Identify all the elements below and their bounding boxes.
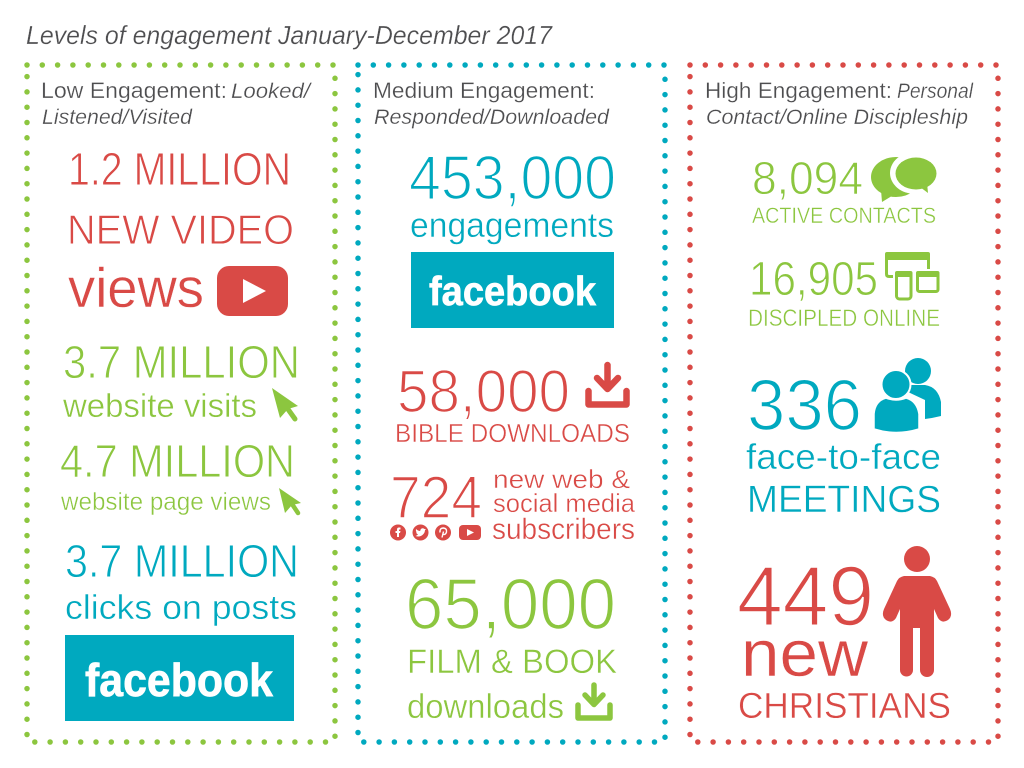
stat: 4.7 million website page views (60, 435, 301, 516)
panel heading: high engagement: High Engagement: (705, 78, 892, 103)
panel heading: low engagement: Listened/Visited (42, 106, 193, 129)
panel heading: medium engagement: Responded/Downloaded (374, 106, 610, 129)
panel border: green dotted (27, 65, 335, 742)
facebook logo block: facebook (85, 654, 273, 706)
stat: 724 new web and social media subscribers: subscribers (492, 513, 635, 546)
stat: 65,000 film and book downloads: 65,000 (405, 565, 616, 645)
stat: 65,000 film and book downloads: downloads (407, 688, 564, 726)
panel heading: high engagement: Contact/Online Discipleship (706, 106, 968, 129)
title: Levels of engagement January-December 2017 (26, 20, 553, 50)
panel: low engagement (27, 65, 335, 742)
stat: 724 new web and social media subscribers: new web & (493, 464, 630, 494)
stat: 336 face-to-face meetings (746, 358, 941, 521)
stat: 3.7 million website visits (62, 336, 300, 424)
icon: youtube (217, 266, 288, 316)
panel heading: medium engagement (373, 78, 610, 129)
stat: 8,094 active contacts: ACTIVE CONTACTS (752, 203, 936, 228)
stat: 1.2 million new video views (67, 143, 294, 319)
stat: 58,000 bible downloads: BIBLE DOWNLOADS (395, 418, 630, 448)
stat: 65,000 film and book downloads (405, 565, 617, 726)
stat: 1.2 million new video views: NEW VIDEO (67, 206, 294, 253)
stat: 65,000 film and book downloads: FILM & BOOK (407, 643, 617, 681)
stat: 724 new web and social media subscribers (390, 464, 636, 546)
facebook logo block (411, 252, 614, 328)
stat: 336 face-to-face meetings: 336 (747, 366, 862, 446)
panel heading: medium engagement: Medium Engagement: (373, 78, 595, 103)
stat: 3.7 million clicks on posts: clicks on posts (65, 589, 297, 627)
stat: 16,905 discipled online (748, 252, 940, 332)
stat: 8,094 active contacts (752, 152, 940, 228)
panel border: teal dotted (358, 65, 665, 742)
stat: 8,094 active contacts: 8,094 (752, 152, 863, 204)
stat: 449 new christians: new (741, 616, 868, 690)
icon: speech bubbles (871, 152, 940, 202)
stat: 724 new web and social media subscribers: 724 (390, 464, 482, 531)
stat: 1.2 million new video views: views (68, 256, 204, 319)
icons: social media (390, 524, 481, 540)
icon: person (883, 546, 951, 677)
stat: 453,000 engagements: 453,000 (409, 144, 616, 213)
stat: 3.7 million website visits: 3.7 MILLION (63, 336, 300, 388)
stat: 336 face-to-face meetings: MEETINGS (747, 479, 941, 521)
stat: 724 new web and social media subscribers: social media (493, 488, 636, 518)
stat: 449 new christians: 449 (737, 549, 874, 643)
stat: 3.7 million clicks on posts: 3.7 MILLION (65, 535, 299, 587)
panel heading: low engagement (41, 78, 312, 129)
panel: high engagement (690, 65, 998, 742)
icon: download (588, 365, 626, 404)
stat: 58,000 bible downloads: 58,000 (397, 358, 570, 425)
stat: 3.7 million clicks on posts (65, 535, 299, 627)
stat: 453,000 engagements: engagements (410, 206, 614, 245)
stat: 449 new christians (737, 546, 951, 726)
stat: 16,905 discipled online: 16,905 (749, 253, 878, 306)
stat: 16,905 discipled online: DISCIPLED ONLINE (748, 305, 940, 332)
stat: 4.7 million website page views: 4.7 MILLION (60, 435, 295, 487)
icon: people (874, 358, 941, 432)
panel: medium engagement (358, 65, 665, 742)
panel heading: high engagement (705, 78, 974, 129)
icon: cursor (272, 388, 298, 419)
stat: 3.7 million website visits: website visits (62, 387, 257, 424)
facebook logo block: facebook (429, 268, 596, 314)
panel heading: high engagement: Personal (897, 80, 974, 103)
stat: 453,000 engagements (409, 144, 616, 245)
stat: 449 new christians: CHRISTIANS (738, 685, 951, 726)
stat: 1.2 million new video views: 1.2 MILLION (68, 143, 291, 195)
icon: devices (885, 252, 940, 299)
stat: 336 face-to-face meetings: face-to-face (746, 436, 941, 477)
panel heading: low engagement: Looked/ (231, 80, 312, 103)
stat: 58,000 bible downloads (395, 358, 630, 448)
icon: download (578, 685, 610, 718)
panel heading: low engagement: Low Engagement: (41, 78, 227, 103)
icon: cursor (279, 488, 301, 513)
facebook logo block (65, 635, 294, 721)
stat: 4.7 million website page views: website page views (60, 488, 271, 516)
panel border: red dotted (690, 65, 998, 742)
